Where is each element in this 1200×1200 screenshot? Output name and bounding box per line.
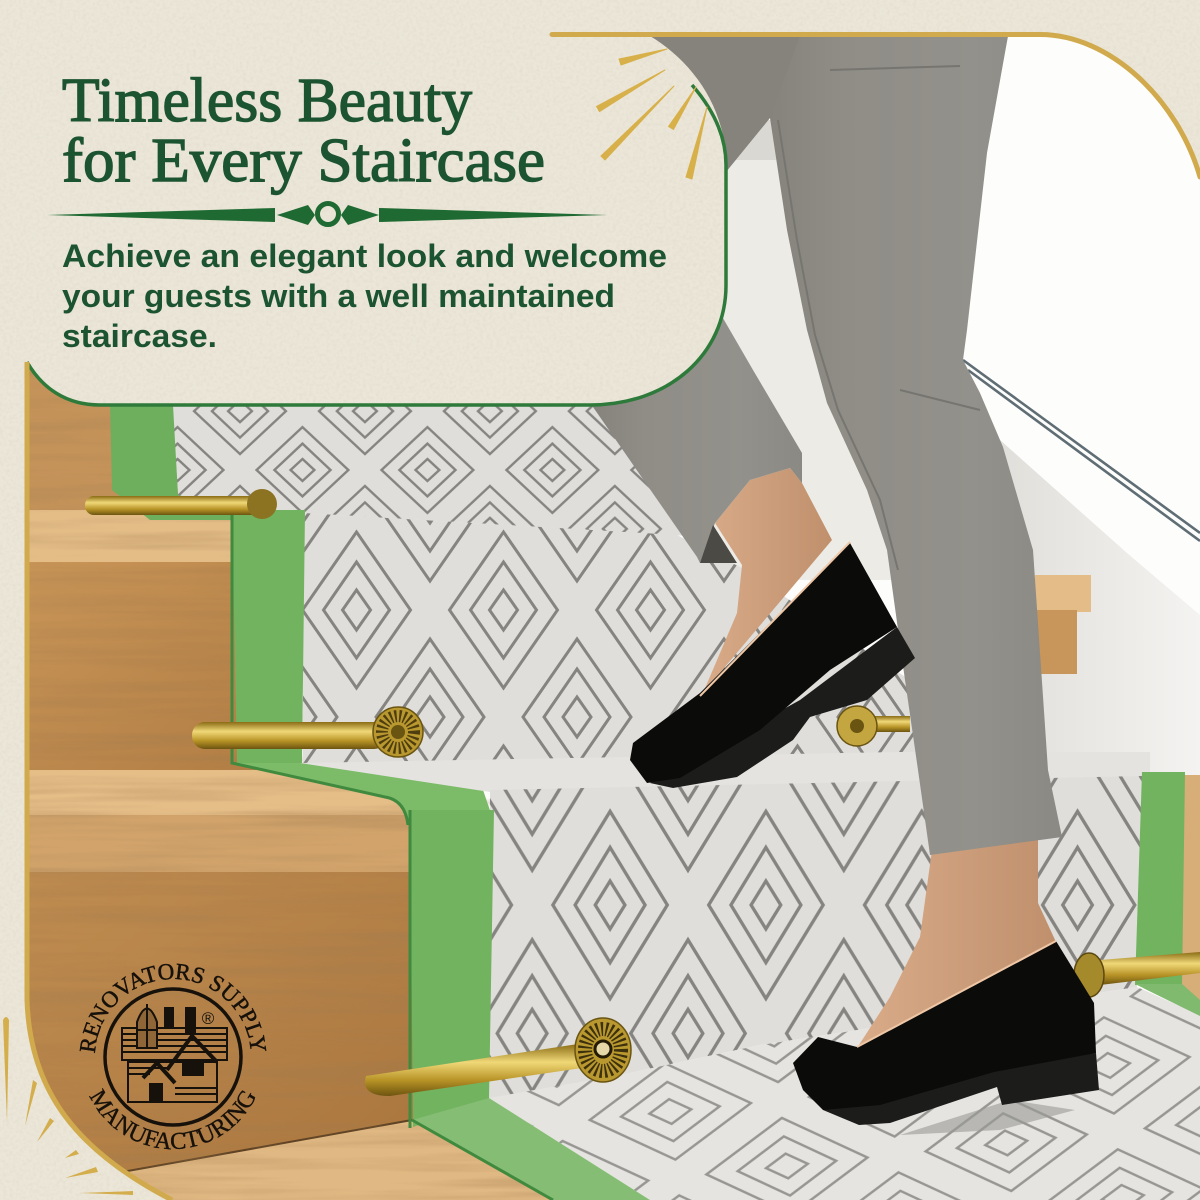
person: rear leg and shoe: [593, 313, 915, 788]
logo bottom arc text: MANUFACTURING: [89, 1088, 256, 1150]
tread shadow under shoe: [900, 1100, 1075, 1135]
rod right small: [837, 706, 910, 746]
title: [62, 67, 545, 195]
title: for Every Staircase: [62, 127, 545, 195]
title: Timeless Beauty: [62, 67, 472, 135]
front shoe upper: [793, 941, 1096, 1110]
wall and window backdrop: [302, 37, 1200, 1200]
card green edge: [27, 85, 726, 405]
carpet runner: lower riser: [300, 752, 1185, 1128]
rod top step: [85, 489, 277, 519]
rear ankle: [703, 468, 832, 693]
rear trouser hem interior: [700, 525, 737, 563]
person: front leg and shoe: [650, 36, 1099, 1125]
rear trouser leg: [593, 313, 802, 563]
panel: headline card: [27, 36, 724, 404]
body text: staircase.: [62, 318, 217, 354]
gold rays top: [596, 49, 707, 179]
carpet runner: lower tread: [412, 984, 1200, 1200]
rod right lower: [1074, 952, 1200, 997]
ornament divider: [47, 204, 607, 225]
logo: Renovators Supply Manufacturing: [80, 964, 266, 1150]
wood steps: [27, 360, 1200, 1200]
rear shoe sole: [650, 627, 915, 788]
carpet runner: middle step: [232, 510, 940, 825]
gold frame top: [552, 34, 1200, 177]
gold rays bottom left: [3, 1017, 133, 1195]
gold frame left: [27, 362, 172, 1200]
front ankle: [857, 836, 1056, 1048]
logo registered mark: ®: [202, 1009, 215, 1028]
front shoe sole: [823, 1053, 1099, 1125]
rod lower step: [365, 1018, 631, 1096]
body text: Achieve an elegant look and welcome: [62, 238, 667, 274]
rear shoe upper: [630, 543, 897, 783]
rod middle step: [192, 707, 423, 757]
body text: your guests with a well maintained: [62, 278, 615, 314]
front thigh: [650, 36, 1008, 172]
logo house: [122, 1004, 227, 1102]
logo top arc text: RENOVATORS SUPPLY: [80, 964, 266, 1054]
brass stair rods: [85, 489, 1200, 1096]
front trouser leg: [770, 36, 1062, 855]
body text: [62, 238, 667, 354]
carpet runner: upper flight: [110, 405, 705, 537]
window rail: [963, 360, 1200, 541]
